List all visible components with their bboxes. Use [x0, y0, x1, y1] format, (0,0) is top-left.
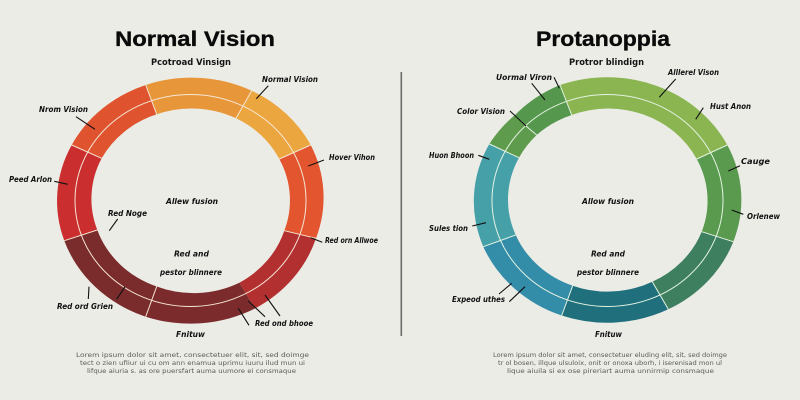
segment labels: protanoppia: Expeod uthes [452, 295, 505, 304]
subtitle: normal vision: Pcotroad Vinsign [151, 58, 231, 68]
center labels: normal vision [159, 197, 222, 277]
segment labels: protanoppia: Uormal Viron [496, 73, 552, 82]
segment labels: protanoppia: Orlenew [747, 212, 780, 221]
segment labels: normal vision: Red ond bhooe [255, 319, 313, 328]
leader lines: protanoppia [472, 77, 743, 302]
segment labels: protanoppia: Hust Anon [710, 102, 751, 111]
center labels: normal vision: Allew fusion [165, 197, 218, 206]
caption: normal vision: lifque aiuria s. as ore puersfart auma uumore ei consmaque [87, 368, 296, 375]
segment labels: normal vision: Hover Vihon [329, 153, 375, 162]
panel: protanoppia [429, 28, 780, 375]
segment labels: protanoppia: Fnituw [595, 330, 622, 339]
center labels: protanoppia: Red and [591, 250, 626, 258]
center labels: protanoppia: Allow fusion [581, 197, 634, 206]
panel: normal vision [9, 28, 378, 375]
title: normal vision: Normal Vision [115, 28, 275, 51]
leader lines: normal vision [54, 86, 324, 325]
caption: protanoppia: Lorem ipsum dolor sit amet, consectetuer eluding elit, sit, sed doimge [493, 352, 727, 359]
segment labels: normal vision: Red orn Allwoe [325, 236, 378, 245]
segment labels: normal vision: Fnituw [176, 330, 205, 339]
caption: protanoppia [493, 352, 727, 375]
center labels: protanoppia [576, 197, 639, 277]
center labels: normal vision: pestor blinnere [159, 268, 222, 277]
center labels: normal vision: Red and [174, 250, 210, 258]
caption: protanoppia: tr ol bosen, illque ulsuloix, onit or onoxa uborh, i iserenisad mon ul [498, 360, 722, 367]
segment labels: normal vision: Peed Arlon [9, 175, 52, 184]
segment labels: protanoppia: Color Vision [457, 107, 505, 116]
caption: normal vision: Lorem ipsum dolor sit amet, consectetuer elit, sit, sed doimge [76, 352, 309, 359]
donut chart: normal vision [57, 78, 324, 324]
segment labels: protanoppia: Cauge [741, 157, 770, 166]
caption: normal vision [76, 352, 309, 375]
caption: protanoppia: lique aiuila si ex ose pireriart auma unnirmip consmaque [507, 368, 714, 375]
segment labels: protanoppia: Huon Bhoon [429, 151, 474, 160]
center labels: protanoppia: pestor blinnere [576, 268, 639, 277]
segment labels: protanoppia: Alllerel Vison [667, 68, 719, 77]
segment labels: protanoppia [429, 68, 780, 339]
segment labels: protanoppia: Sules tion [429, 224, 468, 233]
subtitle: protanoppia: Protror blindign [569, 58, 644, 68]
caption: normal vision: tect o zien ufiiur ui cu om ann enamua uprimu iuuru ilud mun ui [80, 360, 305, 367]
segment labels: normal vision: Red ord Grien [57, 302, 113, 311]
divider [400, 72, 402, 336]
segment labels: normal vision [9, 75, 378, 339]
segment labels: normal vision: Nrom Vision [39, 105, 88, 114]
title: protanoppia: Protanoppia [536, 28, 670, 51]
segment labels: normal vision: Red Noge [108, 209, 147, 218]
segment labels: normal vision: Normal Vision [262, 75, 318, 84]
donut chart: protanoppia [474, 77, 741, 323]
